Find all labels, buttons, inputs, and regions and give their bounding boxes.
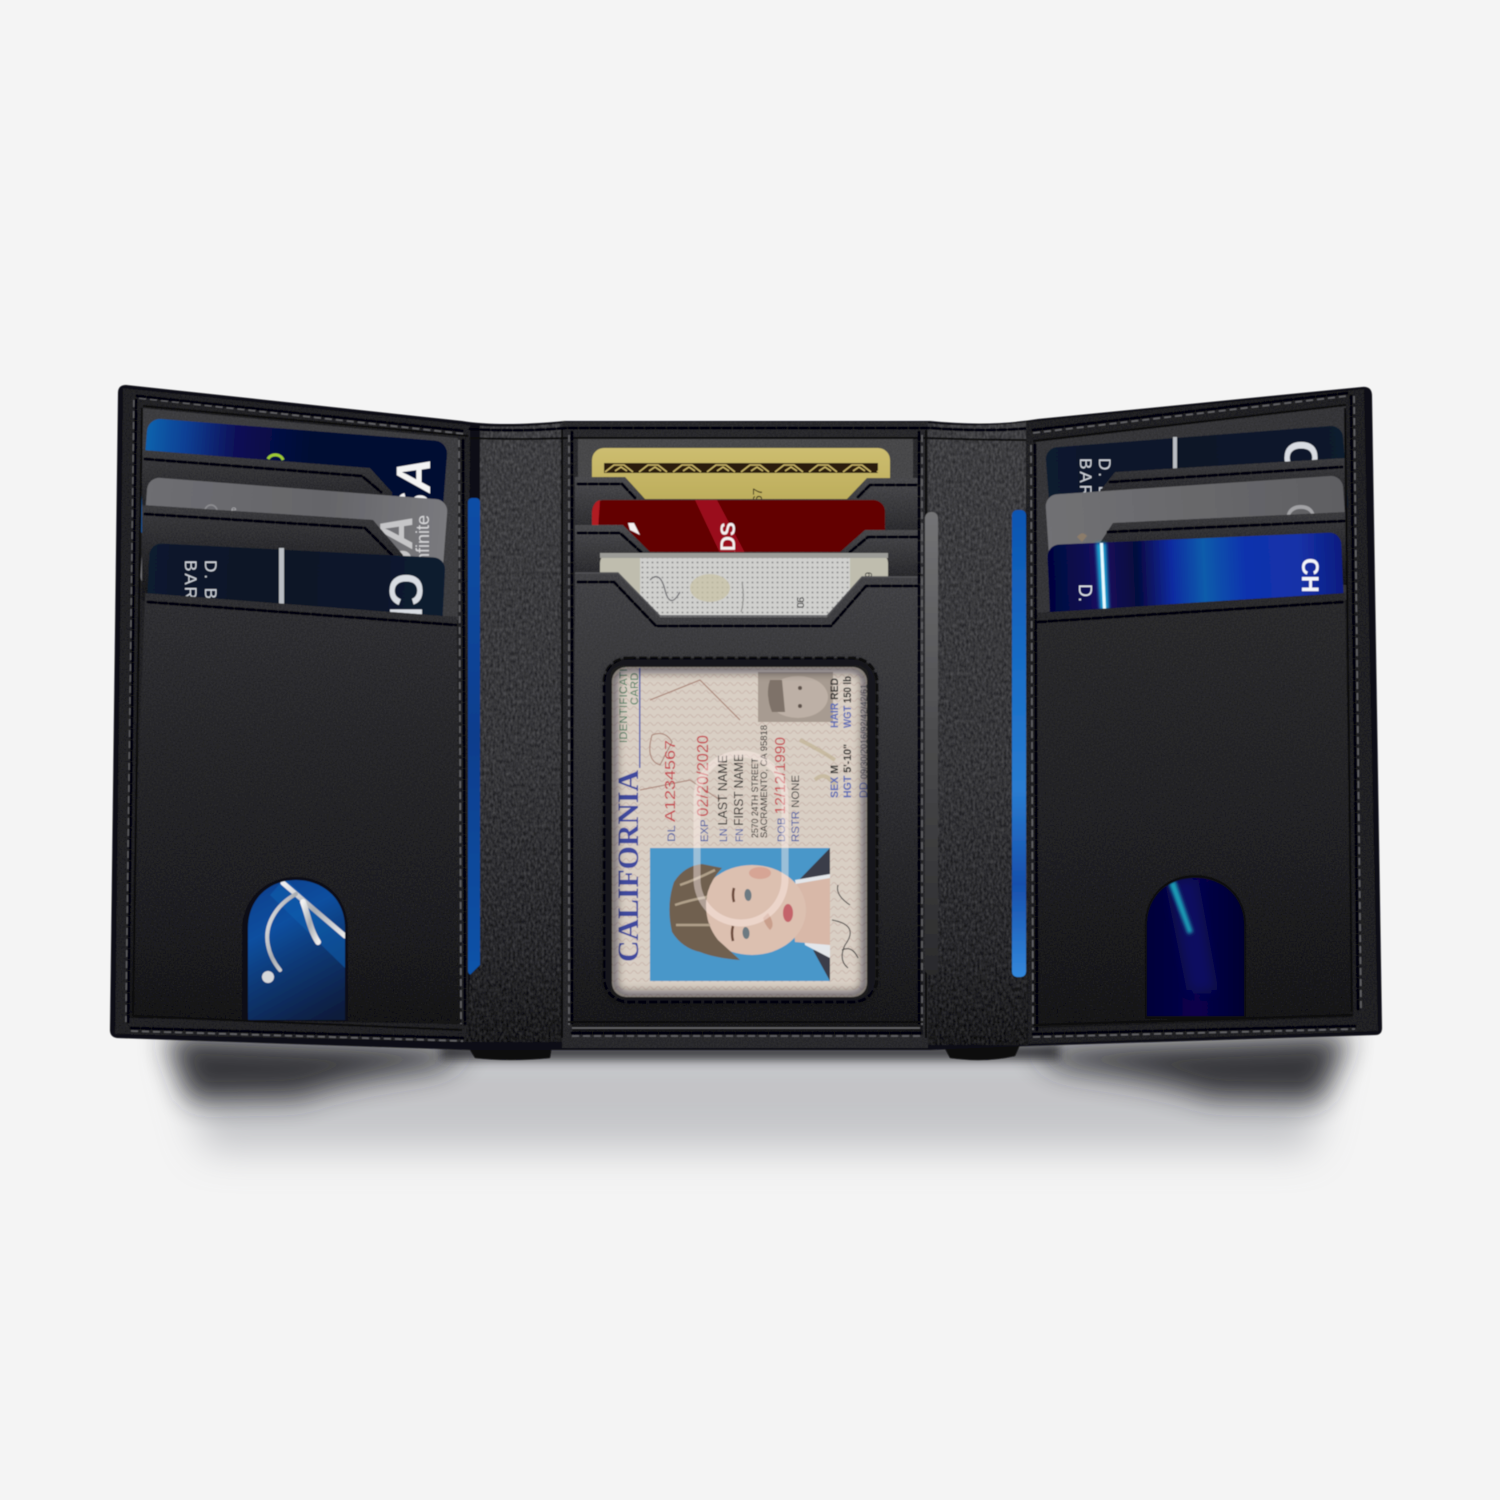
card: gold xyxy=(592,448,890,518)
card: navy: CH xyxy=(380,573,432,639)
center panel stitching xyxy=(470,428,1032,1038)
gray card sliver center xyxy=(925,512,938,975)
first name: FN FIRST NAME xyxy=(731,754,746,842)
left thumb notch with logo card xyxy=(240,870,350,1025)
card: navy right: D. B xyxy=(1095,458,1114,499)
card: navy xyxy=(145,543,446,658)
city: SACRAMENTO, CA 95818 xyxy=(759,725,770,838)
card: navy: D. B xyxy=(201,560,220,601)
ID card xyxy=(612,651,870,997)
blue card sliver left xyxy=(468,498,480,975)
weight: WGT 150 lb xyxy=(842,676,854,728)
ID window stitching xyxy=(604,658,877,1002)
right panel lining xyxy=(1036,406,1348,620)
card: license back: 6 xyxy=(862,572,873,578)
left pocket top stitching xyxy=(148,602,456,625)
right flap 2 stitching xyxy=(1108,521,1344,532)
card: gray right: C xyxy=(1278,503,1322,532)
pocket flap 2 xyxy=(142,505,403,600)
card: blue Visa: VISA xyxy=(388,458,441,570)
left panel leather frame xyxy=(115,388,470,1042)
center lining xyxy=(578,438,913,538)
right main pocket xyxy=(1033,593,1353,1028)
license number: DL A1234567 xyxy=(662,740,679,842)
right flap 2 xyxy=(1095,512,1348,585)
height: HGT 5'-10" xyxy=(842,744,854,798)
card: gray Visa Infinite: Infinite xyxy=(413,515,433,568)
card: license back xyxy=(600,553,888,628)
center main pocket xyxy=(572,573,923,1035)
card: navy: BAR xyxy=(181,560,200,601)
date of birth: DOB 12/12/1990 xyxy=(772,737,789,842)
center panel leather xyxy=(562,422,928,1048)
card label: CARD xyxy=(629,672,641,705)
identification card label: IDENTIFICATION xyxy=(618,651,630,743)
last name: LN LAST NAME xyxy=(715,755,730,842)
flap 1 stitching xyxy=(145,459,381,492)
right spine xyxy=(926,422,1028,1045)
wallet shadow xyxy=(165,1035,1350,1150)
ID vignette xyxy=(612,667,867,997)
card: blue right: CH xyxy=(1296,558,1323,593)
card: gray Visa Infinite xyxy=(140,477,448,622)
panel: right xyxy=(1026,389,1378,1044)
restrictions: RSTR NONE xyxy=(790,775,802,842)
right flap 1 stitching xyxy=(1110,467,1342,482)
icon: logo dot xyxy=(262,971,274,983)
hair: HAIR RED xyxy=(829,678,841,728)
center flap 2 xyxy=(575,525,923,600)
card: gray right xyxy=(1045,475,1348,585)
card: license back: 90 xyxy=(794,597,805,609)
icon: silver antler logo xyxy=(267,883,345,970)
right thumb notch with card xyxy=(1145,875,1246,1020)
blue card sliver right xyxy=(1012,510,1026,977)
card: red xyxy=(592,500,885,629)
right pocket top stitching xyxy=(1038,602,1343,622)
right panel stitching xyxy=(1031,393,1361,1037)
street: 2570 24TH STREET xyxy=(750,758,761,838)
center pocket stitch line xyxy=(578,582,918,626)
ghost portrait xyxy=(758,672,833,722)
portrait photo xyxy=(650,848,830,981)
flap 2 stitching xyxy=(145,514,392,555)
center pocket edge xyxy=(575,573,923,616)
left main pocket xyxy=(128,593,461,1024)
card: navy right: CH xyxy=(1275,440,1327,506)
hologram ring xyxy=(697,754,785,923)
left panel lining xyxy=(142,408,458,620)
card: gold: 4567 xyxy=(750,488,765,517)
blue rule under title xyxy=(639,668,640,768)
panel: left xyxy=(115,388,470,1042)
center flap 1 xyxy=(575,477,922,560)
card: gray Visa Infinite: VISA xyxy=(370,515,422,622)
card: navy right xyxy=(1045,425,1349,538)
wallet silhouette xyxy=(110,385,1382,1050)
card: blue Visa xyxy=(139,418,448,570)
expiry: EXP 02/20/2020 xyxy=(695,735,712,842)
card: blue right: D. xyxy=(1075,584,1095,602)
signature xyxy=(832,885,858,968)
card: gray Visa Infinite: e xyxy=(231,505,237,516)
state title: CALIFORNIA xyxy=(612,770,645,962)
document discriminator: DD 09/30/2016/92/42/42/61 xyxy=(858,684,870,798)
sex: SEX M xyxy=(829,765,841,798)
wallet xyxy=(110,385,1382,1060)
right flap 1 xyxy=(1095,458,1347,530)
pocket flap 1 xyxy=(142,450,392,545)
left spine xyxy=(466,423,562,1042)
left panel stitching xyxy=(126,396,468,1041)
center flap 1 stitching xyxy=(578,484,918,499)
center flap 2 stitching xyxy=(578,533,918,552)
card: blue right xyxy=(1047,532,1345,635)
bottom fold tabs xyxy=(467,1045,1020,1060)
right panel leather frame xyxy=(1026,389,1378,1044)
card: navy right: BAR xyxy=(1076,458,1095,499)
card: red: REWARDS xyxy=(717,522,740,629)
panel: center xyxy=(470,422,1032,1048)
